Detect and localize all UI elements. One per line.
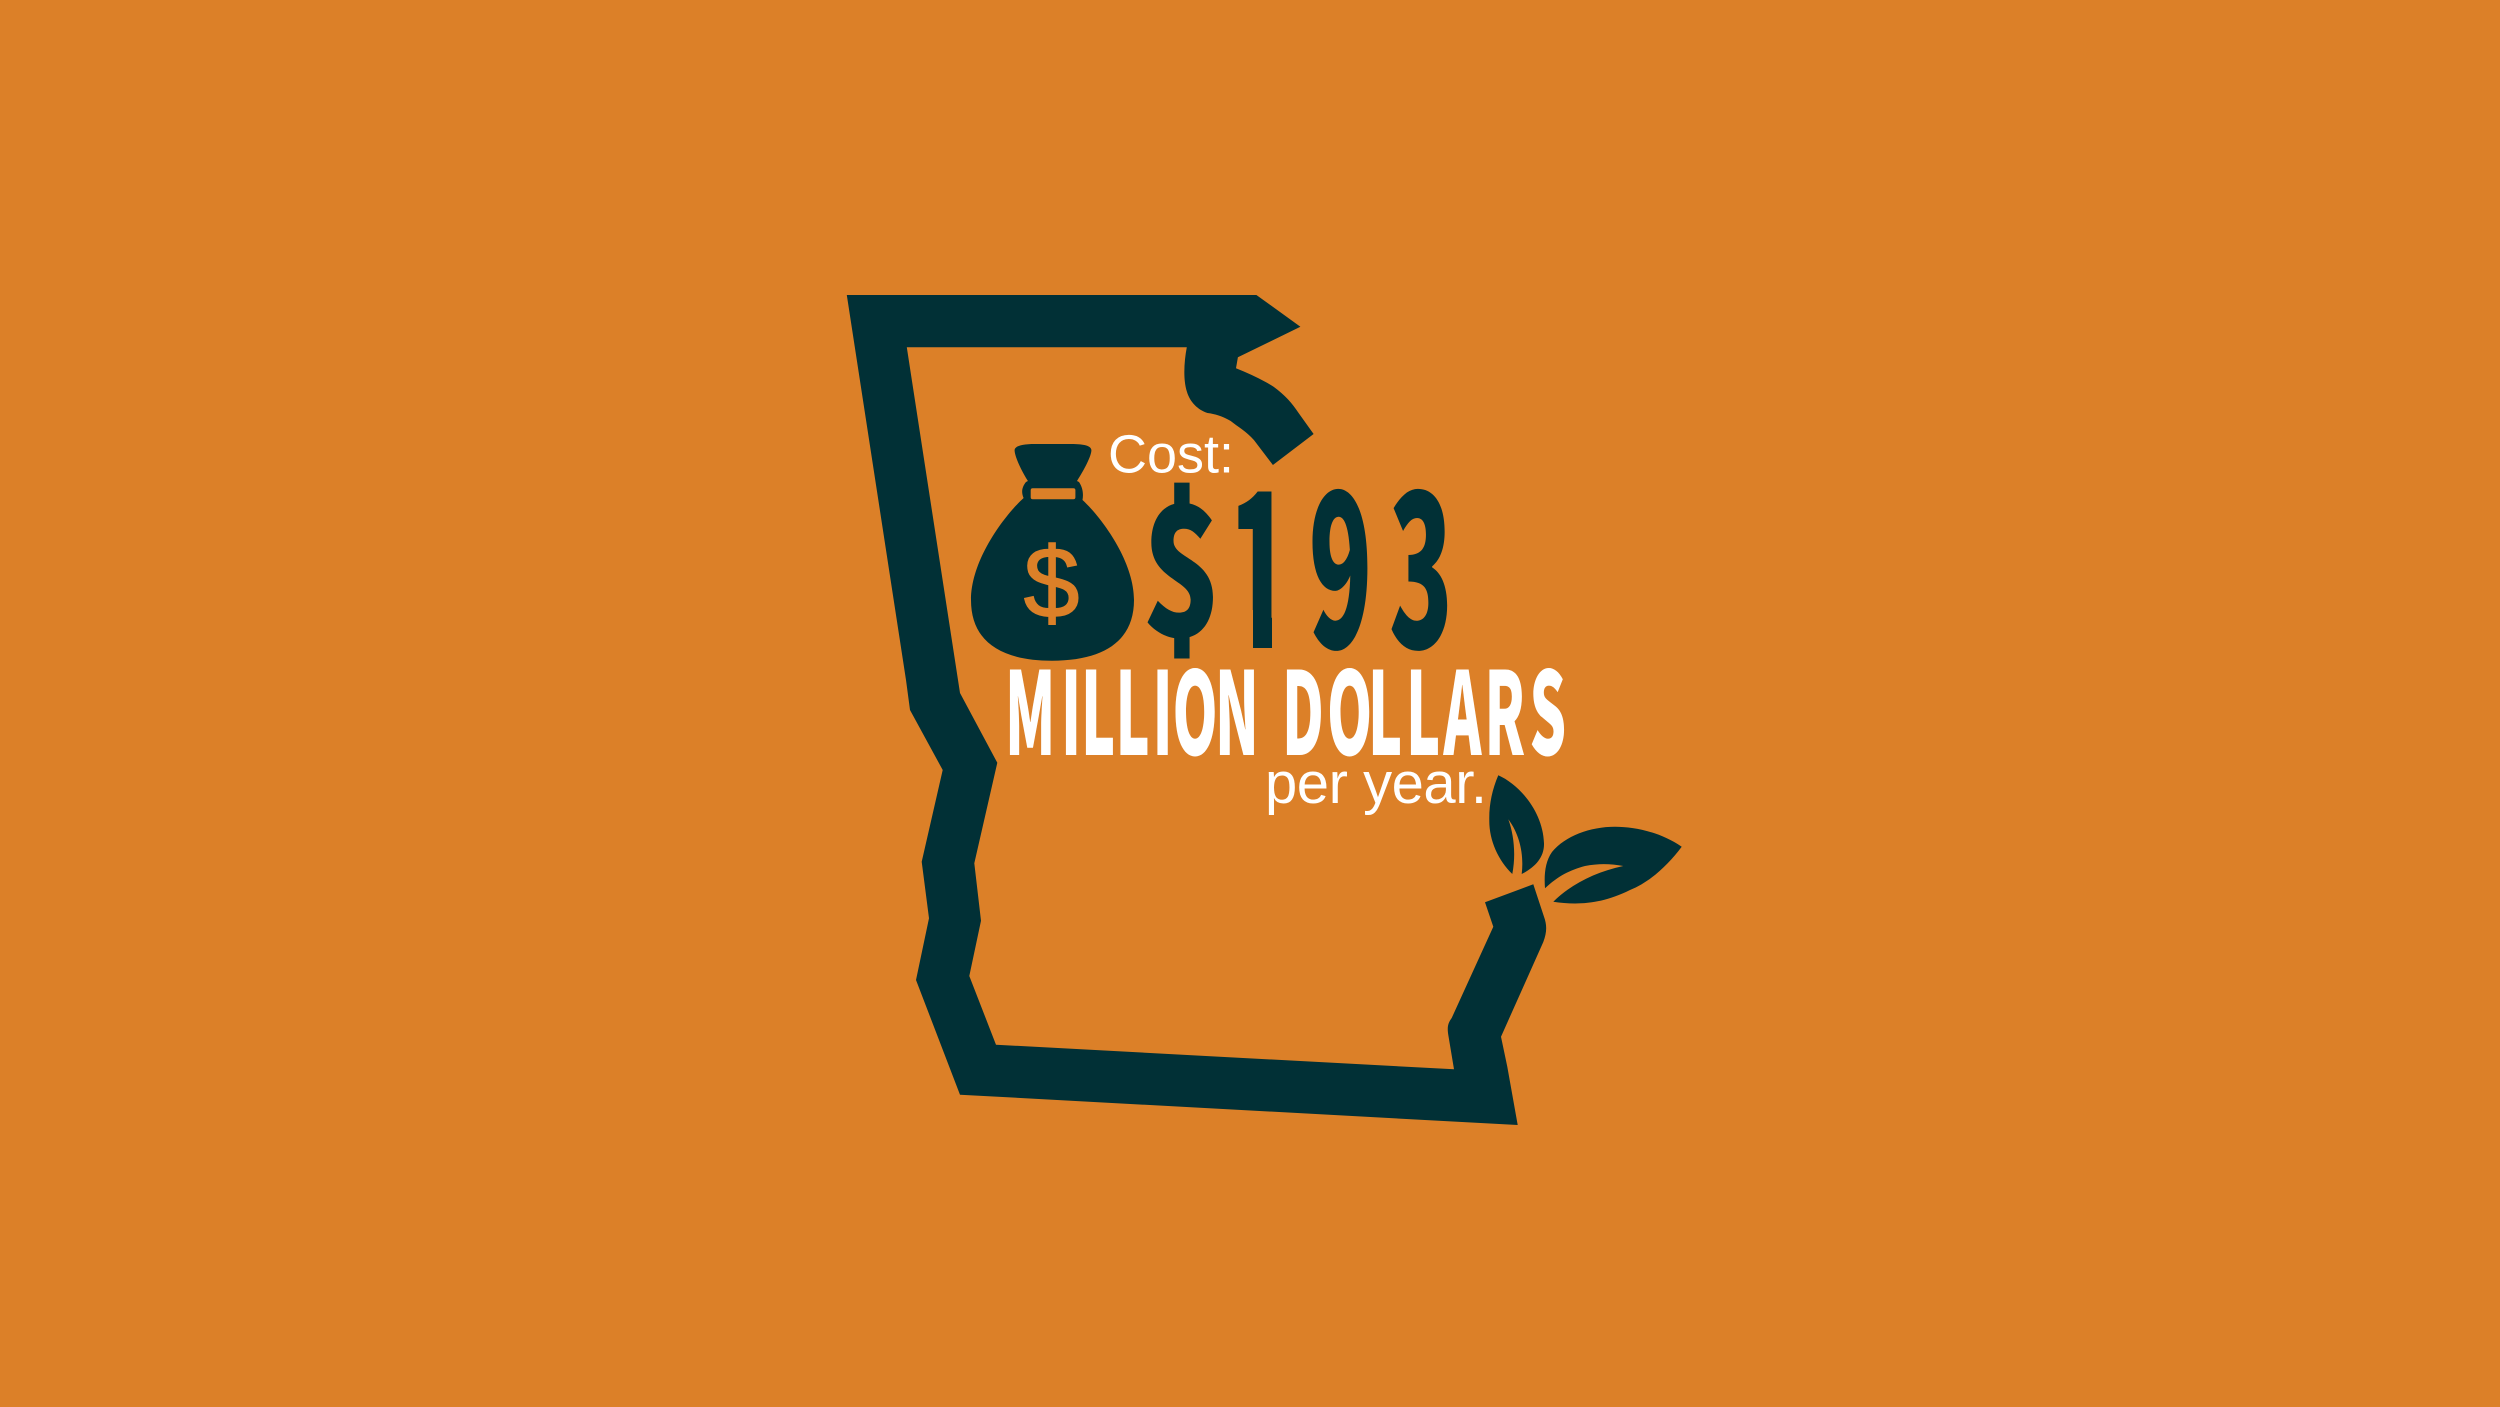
state outline of Georgia: [847, 295, 1546, 1125]
bag tie slot: [1031, 488, 1075, 499]
icon: upper leaf: [1489, 775, 1544, 874]
big number $193: $: [1142, 428, 1222, 689]
million dollars heading: MILLION DOLLARS: [1005, 623, 1566, 789]
per year label: per year.: [1265, 751, 1487, 816]
cost label: Cost:: [1108, 424, 1234, 484]
icon: money bag: [971, 444, 1134, 661]
icon: right leaf: [1545, 827, 1682, 903]
dollar sign on bag: $: [1024, 527, 1079, 639]
big number $193: 193: [1228, 404, 1453, 709]
